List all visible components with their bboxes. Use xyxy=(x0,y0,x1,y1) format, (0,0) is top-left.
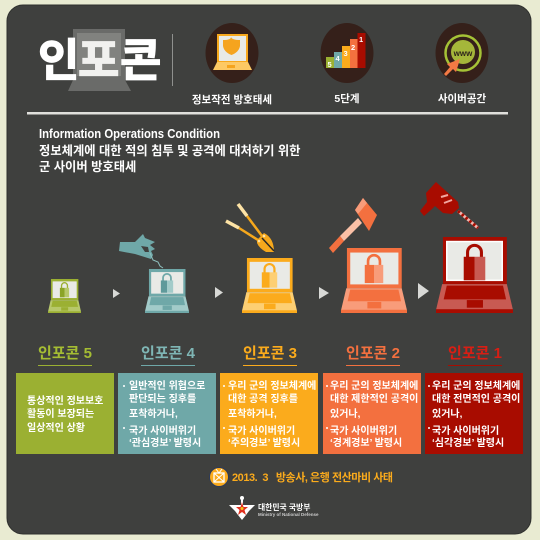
laptop: level 3 xyxy=(242,258,297,313)
title with laptop backdrop: 인 xyxy=(38,35,79,86)
laptop: level 1 xyxy=(436,237,513,313)
label: info ops posture: 정보작전 방호태세 xyxy=(192,93,272,106)
box text: 있거나, xyxy=(432,407,463,420)
box text xyxy=(123,379,205,449)
heading: 인포콘 2 xyxy=(346,345,400,362)
description text: 정보체계에 대한 적의 침투 및 공격에 대처하기 위한 xyxy=(39,143,300,158)
footnote: 2013. 3 방송사, 은행 전산마비 사태 xyxy=(232,470,393,484)
heading: 인포콘 1 xyxy=(448,345,502,362)
description text: Information Operations Condition xyxy=(39,127,220,141)
box text: ‘주의경보’ 발령시 xyxy=(228,436,300,449)
box text: 활동이 보장되는 xyxy=(27,407,94,420)
title with laptop backdrop xyxy=(38,29,161,91)
title with laptop backdrop: 콘 xyxy=(120,35,161,86)
icon: drill xyxy=(420,182,478,228)
box text: 국가 사이버위기 xyxy=(129,424,196,437)
laptop: level 4 xyxy=(145,269,189,313)
box text xyxy=(223,379,316,449)
icon: bolt cutters xyxy=(226,204,274,252)
column: level 4 xyxy=(118,345,216,454)
laptop: level 2 xyxy=(341,248,407,313)
icon: hammer xyxy=(329,198,377,253)
box text: 우리 군의 정보체계에 xyxy=(432,379,520,392)
arrow 4 xyxy=(418,283,429,299)
box text: 우리 군의 정보체계에 xyxy=(330,379,418,392)
description text xyxy=(39,127,300,174)
box text: 대한 제한적인 공격이 xyxy=(330,392,418,405)
label: cyberspace: 사이버공간 xyxy=(438,92,486,105)
box xyxy=(323,373,421,454)
box xyxy=(220,373,318,454)
box text: 포착하거나, xyxy=(129,407,178,420)
icon: five stage bars xyxy=(320,23,374,83)
icon: five stage bars: 5 xyxy=(328,60,332,69)
column: level 5 xyxy=(16,345,114,454)
laptop: level 5 xyxy=(48,279,81,313)
box text: 일반적인 위협으로 xyxy=(129,379,205,392)
box xyxy=(425,373,523,454)
description text: 군 사이버 방호태세 xyxy=(39,159,136,174)
logo: ministry of national defense: 대한민국 국방부 xyxy=(258,502,310,512)
heading: 인포콘 3 xyxy=(243,345,297,362)
box text xyxy=(326,379,418,449)
icon: hand with wire xyxy=(119,234,163,268)
title with laptop backdrop: 포 xyxy=(78,35,119,86)
box text xyxy=(428,379,520,449)
heading: 인포콘 4 xyxy=(141,345,196,362)
arrow 1 xyxy=(113,289,120,298)
box text: 대한 공격 징후를 xyxy=(228,392,298,405)
icon: www cyberspace with cursor xyxy=(436,23,488,83)
box text: ‘경계경보’ 발령시 xyxy=(330,436,402,449)
icon: five stage bars: 4 xyxy=(336,54,340,63)
column: level 2 xyxy=(323,345,421,454)
box text: ‘심각경보’ 발령시 xyxy=(432,436,504,449)
box text: 통상적인 정보보호 xyxy=(27,394,103,407)
box xyxy=(16,373,114,454)
box text: 국가 사이버위기 xyxy=(432,424,499,437)
arrow 3 xyxy=(319,287,329,299)
column: level 1 xyxy=(425,345,523,454)
label: five stages: 5단계 xyxy=(334,92,360,105)
box text: 우리 군의 정보체계에 xyxy=(228,379,316,392)
box text: 있거나, xyxy=(330,407,361,420)
box text: 국가 사이버위기 xyxy=(228,424,295,437)
icon: five stage bars: 2 xyxy=(351,43,355,52)
box xyxy=(118,373,216,454)
logo: ministry of national defense xyxy=(229,496,319,520)
box text: 대한 전면적인 공격이 xyxy=(432,392,520,405)
icon: info ops laptop with shield xyxy=(206,23,258,83)
icon: five stage bars: 1 xyxy=(359,35,363,44)
box text xyxy=(27,394,103,434)
box text: ‘관심경보’ 발령시 xyxy=(129,436,201,449)
box text: 일상적인 상황 xyxy=(27,421,85,434)
logo: ministry of national defense: Ministry of National Defense xyxy=(258,512,319,517)
box text: 판단되는 징후를 xyxy=(129,392,196,405)
column: level 3 xyxy=(220,345,318,454)
box text: 국가 사이버위기 xyxy=(330,424,397,437)
heading: 인포콘 5 xyxy=(38,345,92,362)
arrow 2 xyxy=(215,287,223,298)
icon: five stage bars: 3 xyxy=(344,49,348,58)
icon: broken tv xyxy=(210,468,228,486)
icon: www cyberspace with cursor: www xyxy=(453,49,473,58)
box text: 포착하거나, xyxy=(228,407,277,420)
